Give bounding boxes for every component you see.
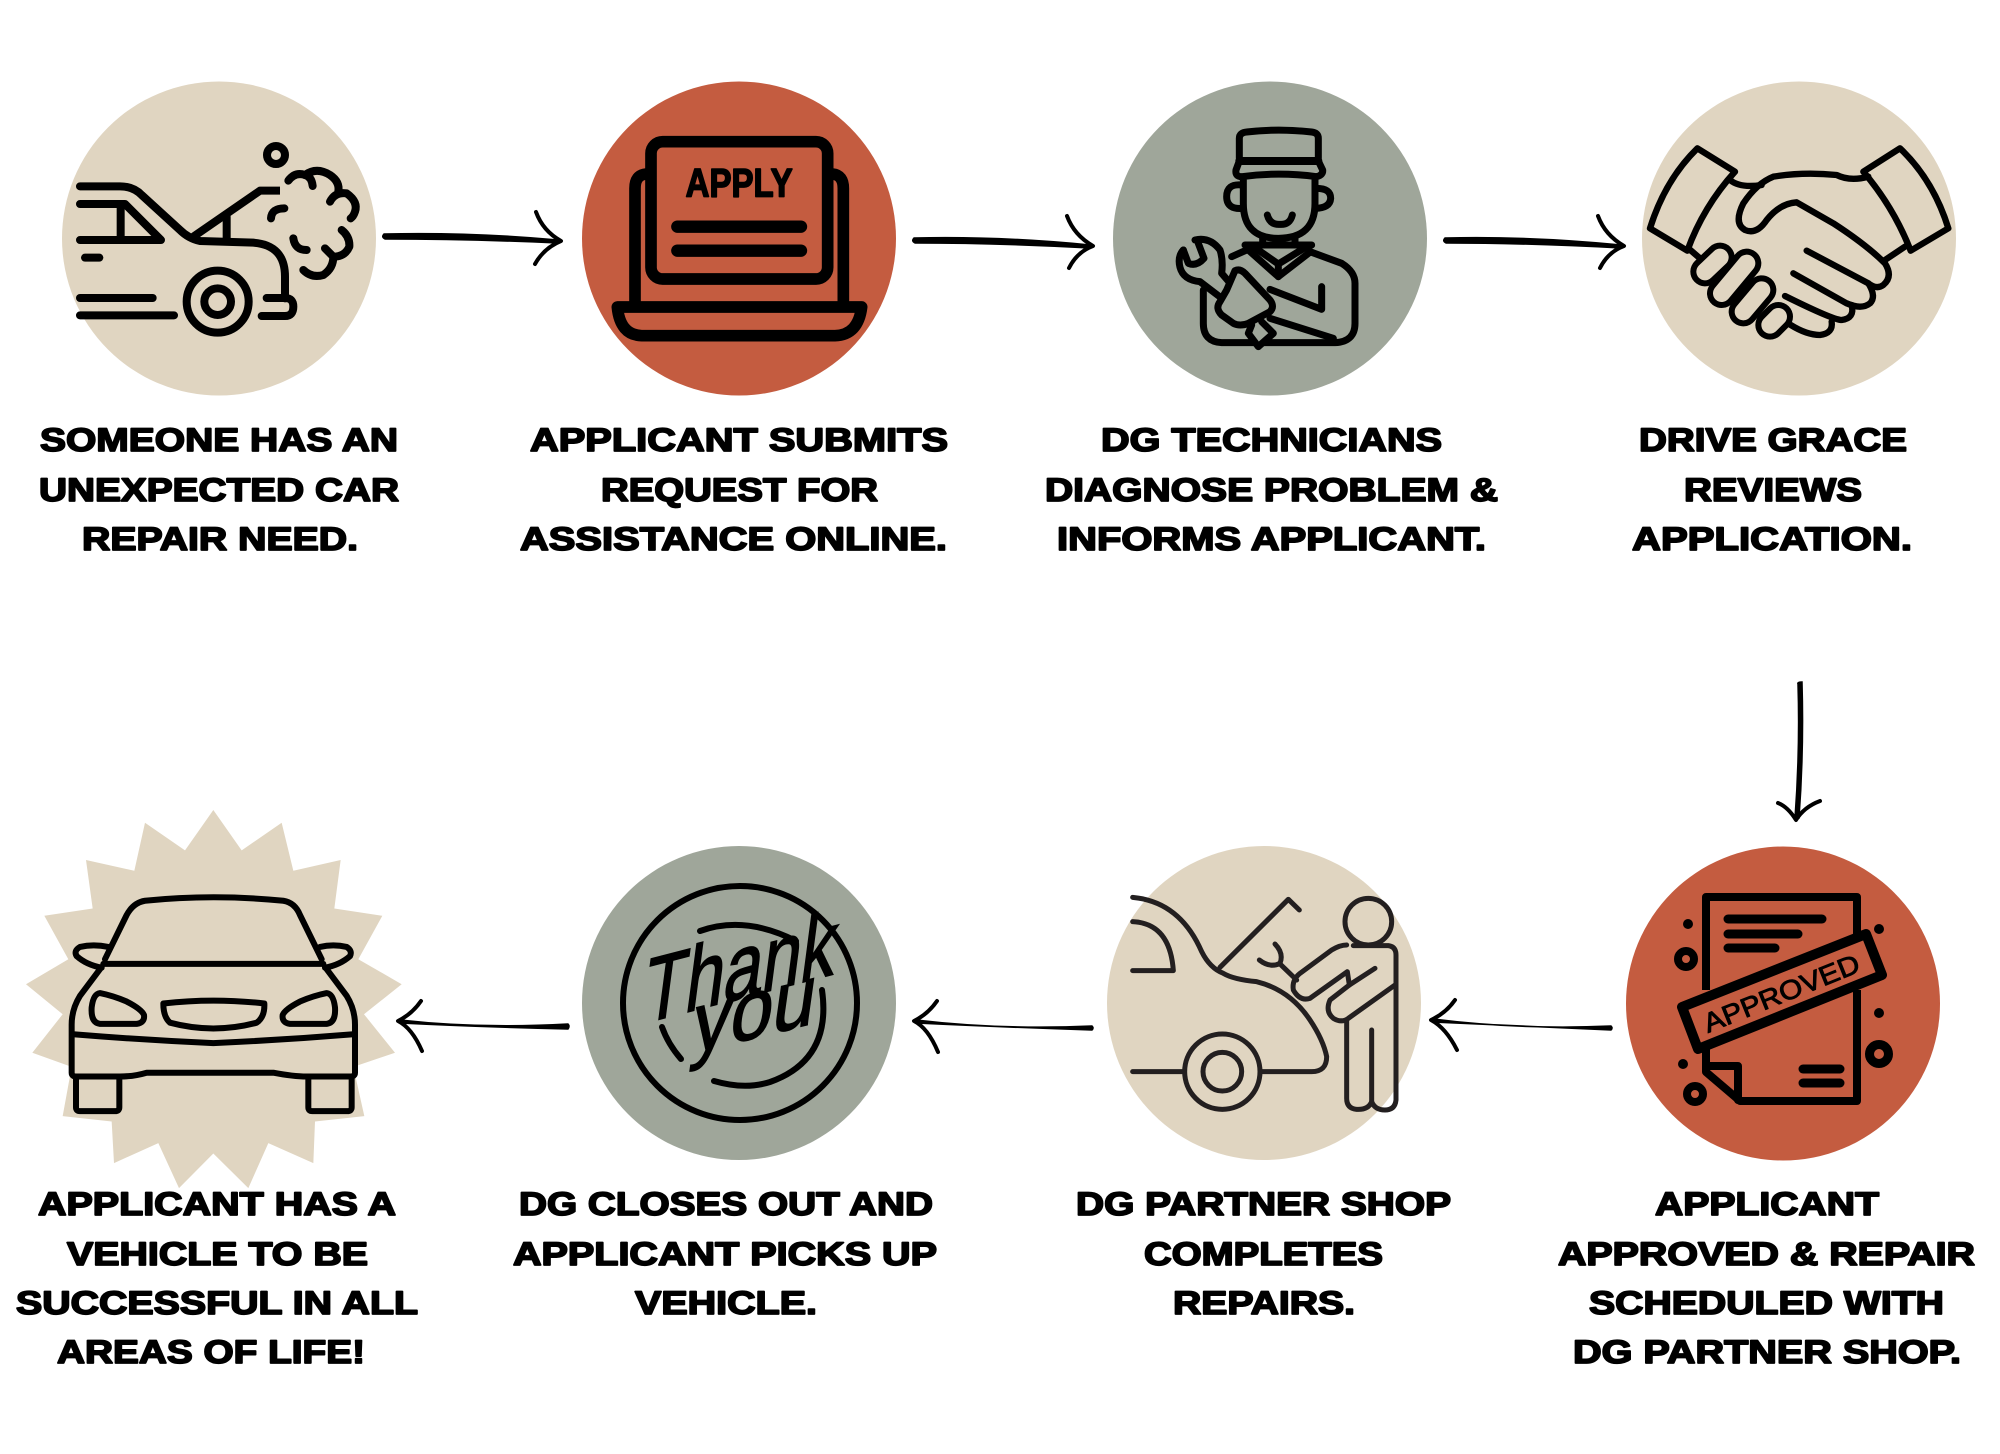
- icon: mechanic repairing car: [1133, 897, 1396, 1110]
- icon: broken-down car with smoke: [80, 146, 356, 333]
- caption step 7: VEHICLE.: [635, 1285, 817, 1321]
- arrow: step 2 to step 3: [913, 216, 1093, 268]
- arrow: step 7 to step 8: [398, 1001, 569, 1051]
- caption step 5: [1558, 1186, 1975, 1370]
- icon: thank you badge: you: [687, 945, 823, 1074]
- caption step 3: INFORMS APPLICANT.: [1057, 521, 1486, 557]
- caption step 2: ASSISTANCE ONLINE.: [520, 521, 947, 557]
- caption step 6: [1076, 1186, 1451, 1321]
- circle background step 1: [62, 82, 376, 396]
- caption step 6: REPAIRS.: [1173, 1285, 1355, 1321]
- caption step 6: DG PARTNER SHOP: [1076, 1186, 1451, 1222]
- caption step 3: DIAGNOSE PROBLEM &: [1045, 472, 1498, 508]
- icon: mechanic holding wrench: [1179, 130, 1355, 347]
- caption step 8: SUCCESSFUL IN ALL: [16, 1285, 418, 1321]
- icon: thank you badge: Thank: [638, 890, 844, 1045]
- step 5: applicant approved: [1558, 846, 1975, 1370]
- caption step 2: REQUEST FOR: [601, 472, 878, 508]
- caption step 2: [520, 422, 948, 557]
- step 4: drive grace reviews: [1632, 82, 1956, 557]
- arrow: step 6 to step 7: [914, 1001, 1093, 1052]
- caption step 5: APPLICANT: [1655, 1186, 1879, 1222]
- caption step 3: DG TECHNICIANS: [1101, 422, 1442, 458]
- arrow: step 3 to step 4: [1444, 216, 1624, 268]
- caption step 1: REPAIR NEED.: [82, 521, 358, 557]
- step 3: technicians diagnose: [1045, 82, 1498, 557]
- caption step 6: COMPLETES: [1144, 1236, 1383, 1272]
- circle background step 7: [582, 846, 896, 1160]
- icon: front view of car: [72, 897, 355, 1111]
- caption step 8: AREAS OF LIFE!: [57, 1334, 365, 1370]
- circle background step 6: [1107, 846, 1421, 1160]
- caption step 4: [1632, 422, 1912, 557]
- starburst background step 8: [26, 810, 402, 1188]
- caption step 7: [513, 1186, 937, 1321]
- step 7: closes out and pick up: [513, 846, 937, 1321]
- step 6: partner shop completes repairs: [1076, 846, 1451, 1321]
- stamp label: APPROVED: [1699, 949, 1864, 1039]
- circle background step 3: [1113, 82, 1427, 396]
- arrow: step 1 to step 2: [383, 212, 561, 264]
- circle background step 2: [582, 82, 896, 396]
- step 8: applicant has a vehicle: [16, 810, 418, 1370]
- icon: thank you badge: [623, 886, 857, 1120]
- caption step 5: DG PARTNER SHOP.: [1573, 1334, 1961, 1370]
- caption step 8: [16, 1186, 418, 1370]
- icon: laptop with apply form: [617, 142, 862, 336]
- caption step 7: DG CLOSES OUT AND: [519, 1186, 933, 1222]
- icon: approved document: [1678, 897, 1888, 1102]
- caption step 1: [39, 422, 399, 557]
- caption step 5: APPROVED & REPAIR: [1558, 1236, 1975, 1272]
- caption step 1: SOMEONE HAS AN: [40, 422, 398, 458]
- caption step 3: [1045, 422, 1498, 557]
- circle background step 4: [1642, 82, 1956, 396]
- caption step 1: UNEXPECTED CAR: [39, 472, 399, 508]
- caption step 4: REVIEWS: [1684, 472, 1862, 508]
- label on laptop form: APPLY: [686, 161, 793, 205]
- caption step 5: SCHEDULED WITH: [1589, 1285, 1944, 1321]
- arrow: step 5 to step 6: [1431, 1000, 1612, 1050]
- caption step 8: VEHICLE TO BE: [67, 1236, 368, 1272]
- step 1: unexpected car repair: [39, 82, 399, 557]
- step 2: applicant submits online: [520, 82, 948, 557]
- caption step 7: APPLICANT PICKS UP: [513, 1236, 937, 1272]
- caption step 4: APPLICATION.: [1632, 521, 1912, 557]
- caption step 2: APPLICANT SUBMITS: [530, 422, 948, 458]
- arrow: step 4 down to step 5: [1778, 682, 1820, 820]
- circle background step 5: [1626, 846, 1940, 1160]
- icon: handshake: [1650, 148, 1948, 335]
- caption step 4: DRIVE GRACE: [1639, 422, 1907, 458]
- caption step 8: APPLICANT HAS A: [38, 1186, 396, 1222]
